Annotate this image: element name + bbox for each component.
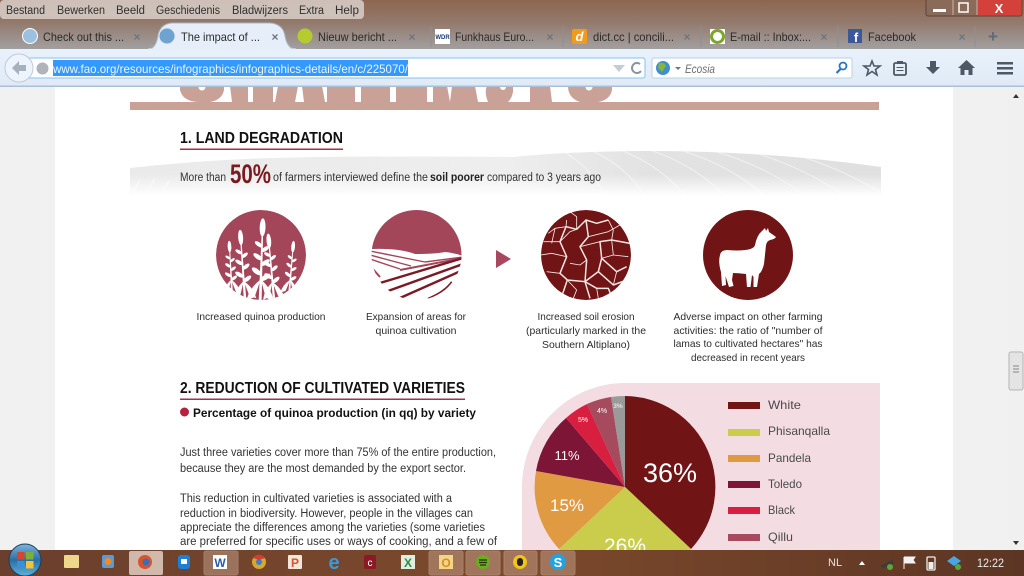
- caption: adverse impact: decreased in recent years: [691, 352, 805, 364]
- pie chart: production by variety: 11%: [554, 448, 580, 463]
- statement: 50 percent of farmers: of farmers interviewed define the: [273, 172, 428, 184]
- legend: White: [768, 398, 801, 412]
- taskbar application icons: c: [368, 558, 372, 569]
- system tray: NL: [828, 557, 842, 569]
- tabs: Funkhaus Euro...: [455, 30, 534, 44]
- caption: soil erosion: Southern Altiplano): [542, 339, 630, 351]
- icon: quinoa plants: [216, 210, 306, 302]
- legend: Phisanqalla: [768, 424, 830, 438]
- icon: cracked soil: [541, 210, 631, 300]
- window controls: [926, 0, 1022, 16]
- pie chart: production by variety: 26%: [604, 535, 646, 558]
- taskbar application icons: S: [554, 555, 563, 570]
- tabs: ×: [271, 30, 279, 44]
- tabs: WDR: [435, 35, 450, 41]
- system tray: 12:22: [977, 558, 1004, 570]
- text block: varieties explanation: This reduction in cultivated varieties is associated with a: [180, 493, 453, 505]
- menu bar: Bewerken: [57, 5, 105, 17]
- banner: cropped heading and rule: [130, 87, 879, 110]
- heading: reduction of cultivated varieties: 2. REDUCTION OF CULTIVATED VARIETIES: [180, 380, 465, 397]
- caption: expansion of areas: Expansion of areas for: [366, 311, 466, 323]
- tabs: dict.cc | concili...: [593, 30, 674, 44]
- legend: Toledo: [768, 477, 802, 491]
- caption: soil erosion: [526, 311, 646, 351]
- icon: expanding fields: [370, 205, 463, 300]
- window controls: X: [995, 1, 1004, 16]
- caption: expansion of areas: [366, 312, 466, 336]
- browser title and tab strip: [0, 0, 1024, 50]
- tabs: ×: [683, 30, 691, 44]
- statement: 50 percent of farmers: [180, 164, 601, 184]
- address bar with selected URL: www.fao.org/resources/infographics/infographics-details/en/c/225070/: [52, 62, 409, 76]
- legend: Pandela: [768, 451, 811, 465]
- menu bar: Geschiedenis: [156, 5, 220, 17]
- caption: increased production: Increased quinoa production: [196, 311, 326, 323]
- arrow: [496, 250, 511, 268]
- menu bar: Extra: [299, 5, 325, 17]
- scrollbar: [1008, 86, 1024, 550]
- caption: expansion of areas: quinoa cultivation: [376, 325, 457, 337]
- text block: varieties explanation: [180, 447, 498, 548]
- menu bar: Bestand: [6, 5, 45, 17]
- taskbar application icons: X: [404, 556, 412, 570]
- text block: varieties explanation: reduction in biodiversity. However, people in the villages can: [180, 508, 473, 520]
- pie chart: production by variety: 36%: [643, 458, 697, 488]
- text block: varieties explanation: appreciate the differences among the varieties (some varieties: [180, 522, 485, 534]
- tabs: ×: [408, 30, 416, 44]
- tabs: Facebook: [868, 30, 917, 44]
- active tab: [148, 23, 296, 50]
- address bar with selected URL: [5, 54, 645, 82]
- grey wave strip: [130, 151, 881, 190]
- taskbar application icons: O: [441, 556, 451, 570]
- caption: adverse impact: activities: the ratio of "number of: [674, 325, 823, 337]
- tabs: The impact of ...: [181, 30, 260, 44]
- subheading: percentage by variety: Percentage of quinoa production (in qq) by variety: [193, 406, 476, 420]
- tabs: Nieuw bericht ...: [318, 30, 397, 44]
- tabs: +: [988, 27, 998, 46]
- system tray: [828, 556, 1004, 570]
- taskbar application icons: [64, 551, 575, 575]
- search box: Ecosia: [685, 64, 715, 76]
- tabs: ×: [820, 30, 828, 44]
- taskbar application icons: e: [328, 552, 340, 574]
- legend: [728, 398, 830, 544]
- tabs: [22, 26, 998, 47]
- infographic page content: [130, 84, 881, 576]
- icon: llama: [703, 210, 793, 300]
- menu bar: Help: [335, 5, 359, 17]
- statement: 50 percent of farmers: compared to 3 years ago: [487, 172, 601, 184]
- pie chart: production by variety: 4%: [597, 408, 607, 415]
- menu bar: [6, 5, 359, 17]
- panel: pie chart background: [522, 383, 880, 560]
- tabs: f: [854, 30, 859, 45]
- text block: varieties explanation: are preferred for specific uses or ways of cooking, and a few of: [180, 536, 498, 548]
- statement: 50 percent of farmers: More than: [180, 172, 226, 184]
- tabs: ×: [546, 30, 554, 44]
- legend: Qillu: [768, 530, 793, 544]
- search box: [652, 58, 852, 78]
- menu bar: Beeld: [116, 5, 145, 17]
- tabs: Check out this ...: [43, 30, 124, 44]
- caption: soil erosion: Increased soil erosion: [538, 311, 635, 323]
- taskbar application icons: P: [291, 556, 299, 570]
- pie chart: production by variety: 15%: [550, 496, 584, 515]
- heading: land degradation: 1. LAND DEGRADATION: [180, 130, 343, 147]
- toolbar icons: [864, 60, 1013, 75]
- tabs: d: [576, 29, 585, 44]
- statement: 50 percent of farmers: soil poorer: [430, 172, 484, 184]
- tabs: ×: [958, 30, 966, 44]
- caption: adverse impact: Adverse impact on other farming: [674, 311, 823, 323]
- menu bar: Bladwijzers: [232, 5, 288, 17]
- taskbar application icons: W: [214, 556, 226, 570]
- tabs: E-mail :: Inbox:...: [730, 30, 811, 44]
- text block: varieties explanation: Just three varieties cover more than 75% of the entire production,: [180, 447, 496, 459]
- statement: 50 percent of farmers: 50%: [230, 159, 271, 189]
- pie chart: production by variety: [534, 396, 716, 550]
- caption: adverse impact: lamas to cultivated hectares" has: [674, 338, 822, 350]
- start button: [9, 544, 41, 576]
- navigation toolbar: [0, 49, 1024, 87]
- text block: varieties explanation: because they are the most demanded by the export sector.: [180, 463, 466, 475]
- caption: soil erosion: (particularly marked in the: [526, 325, 646, 337]
- pie chart: production by variety: 5%: [578, 417, 588, 424]
- tabs: ×: [133, 30, 141, 44]
- pie chart: production by variety: 3%: [613, 403, 623, 410]
- legend: Black: [768, 503, 796, 517]
- caption: adverse impact: [674, 311, 823, 364]
- taskbar: [0, 550, 1024, 576]
